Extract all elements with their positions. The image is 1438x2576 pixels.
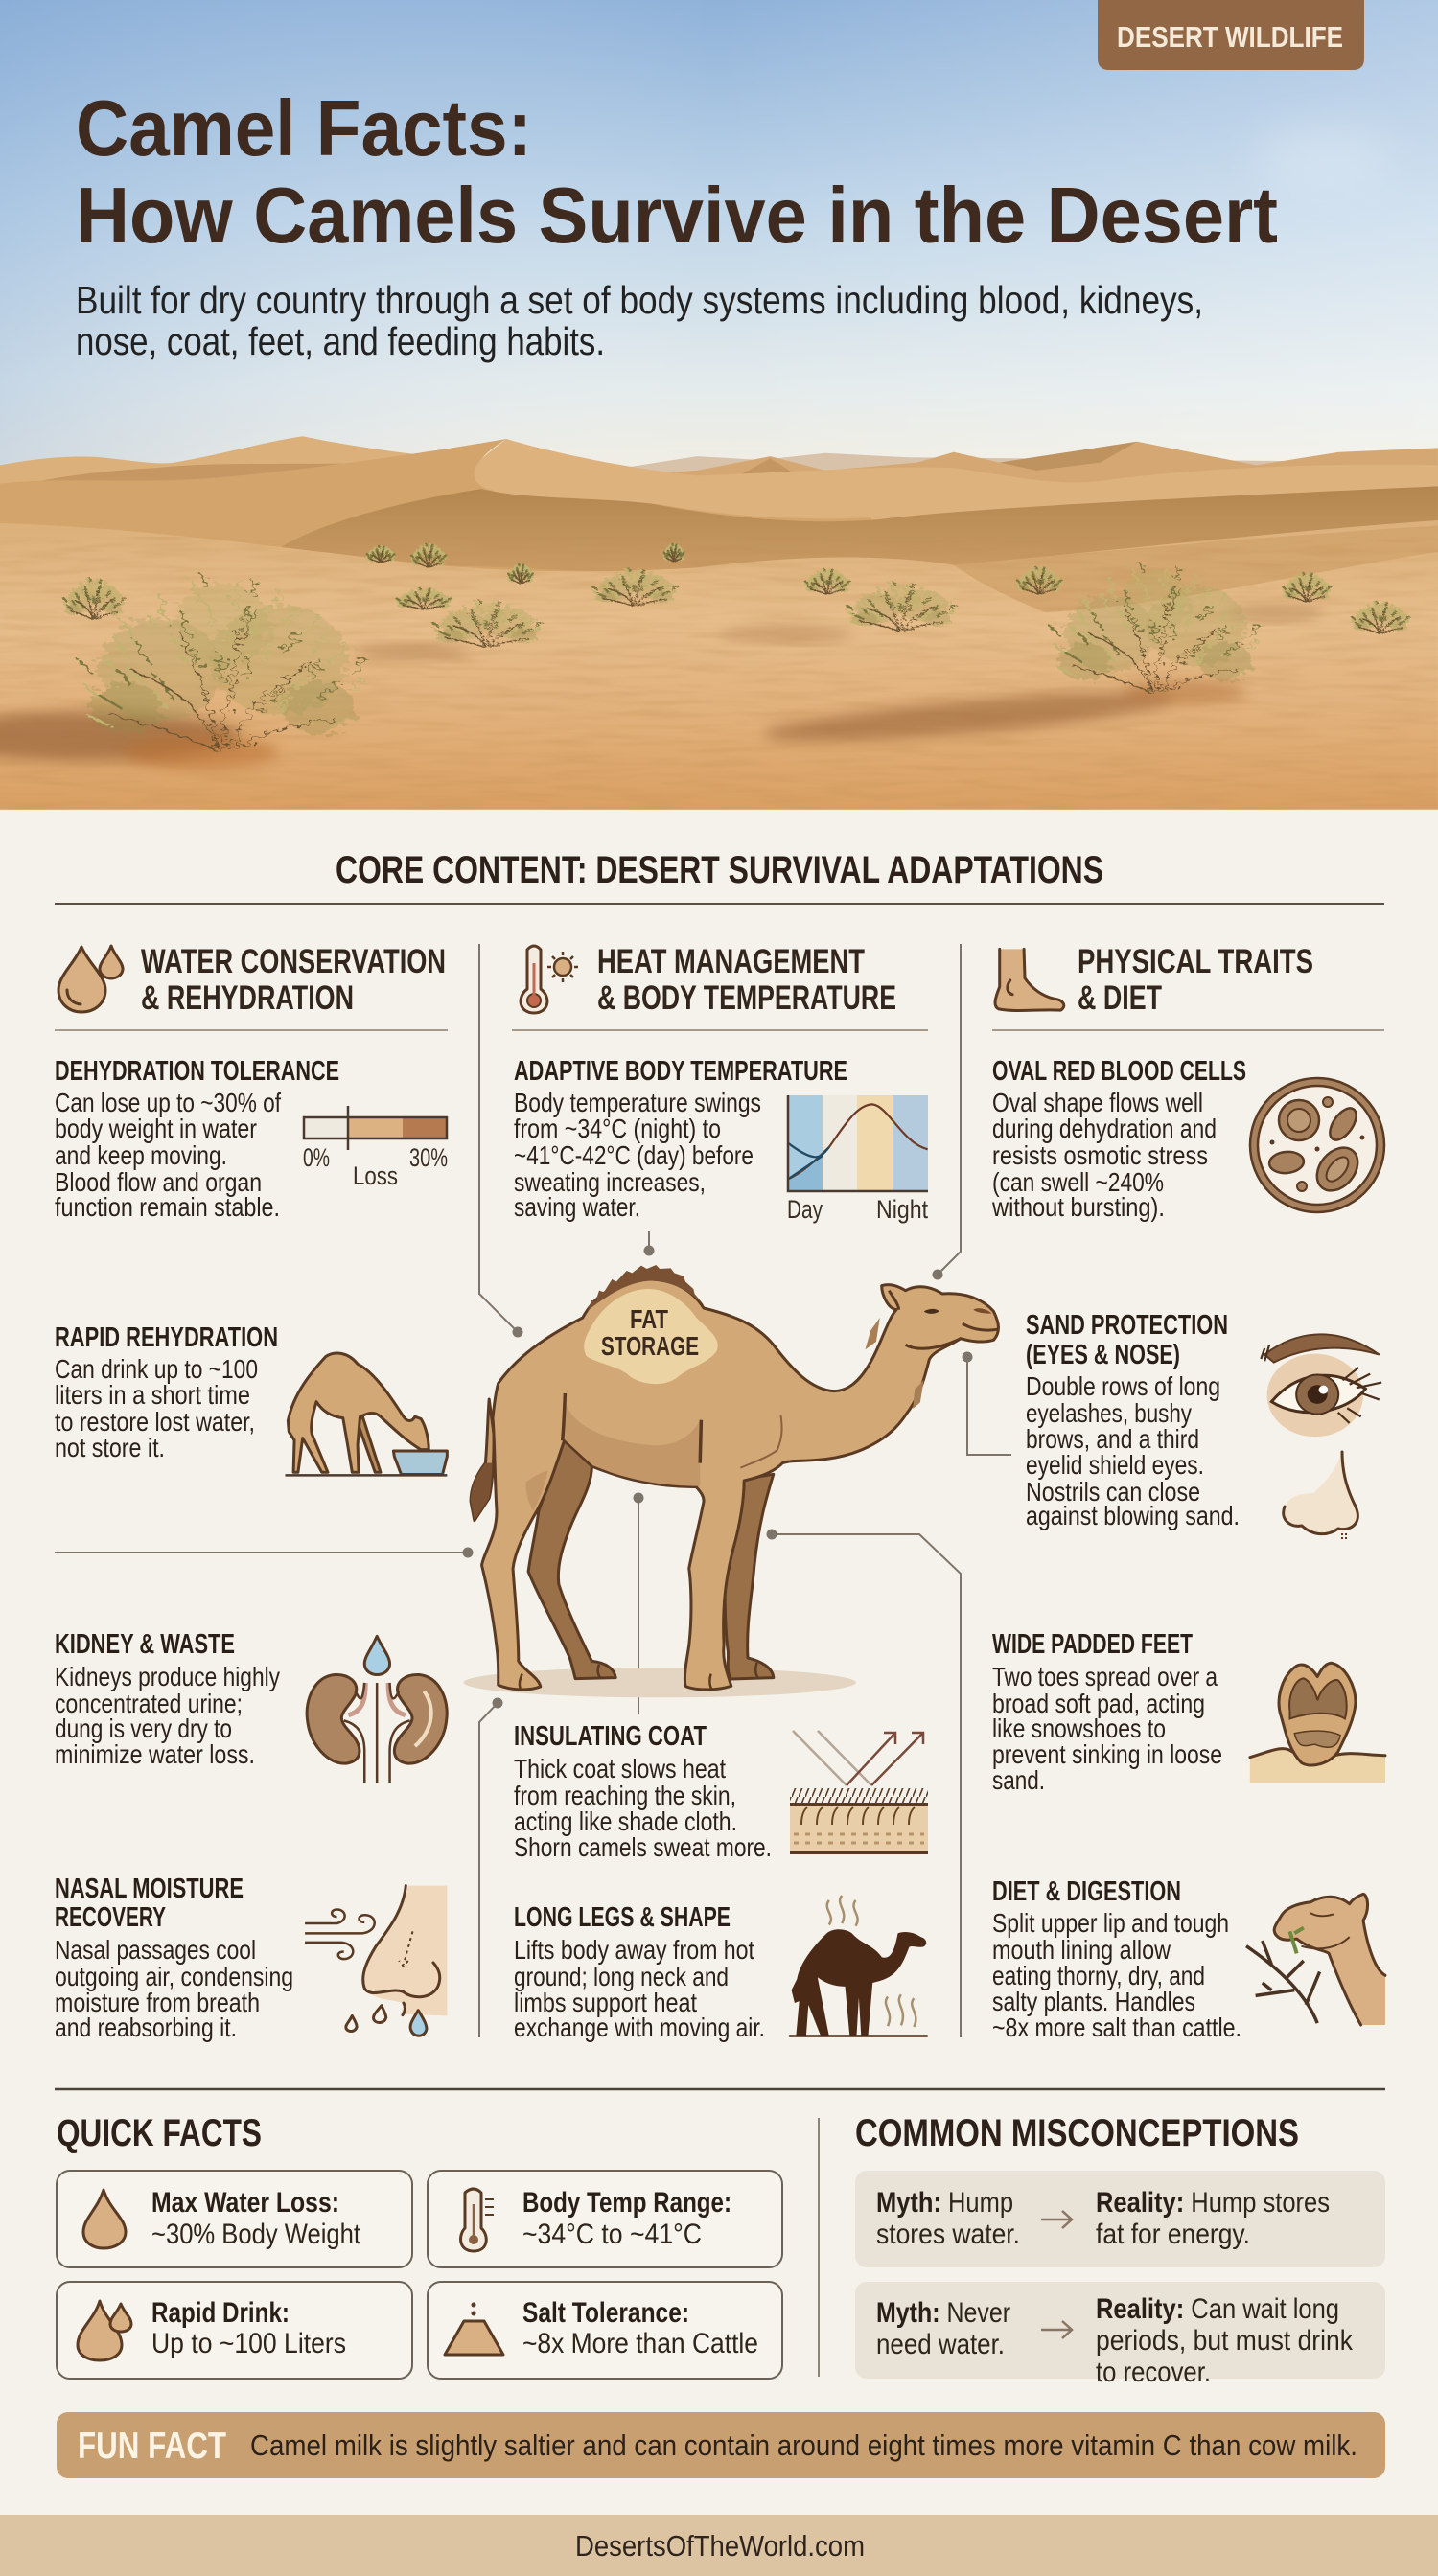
panel: long legs and shape: Lifts body away from hot xyxy=(514,1935,754,1965)
panel: oval red blood cells: resists osmotic stress xyxy=(992,1140,1208,1170)
callout: fun fact xyxy=(57,2412,1385,2478)
panel: nasal moisture recovery: outgoing air, condensing xyxy=(55,1962,293,1991)
hump hair xyxy=(587,1265,704,1311)
panel: long legs and shape: ground; long neck and xyxy=(514,1962,729,1991)
panel: rapid rehydration: not store it. xyxy=(55,1433,165,1462)
chart: water loss bar: 30% xyxy=(409,1143,448,1172)
far hind leg xyxy=(528,1440,615,1679)
belly shade xyxy=(565,1396,700,1486)
panel: wide padded feet: prevent sinking in loose xyxy=(992,1739,1222,1769)
illustration: camel with fat storage: STORAGE xyxy=(601,1331,699,1361)
icon: thermometer and sun xyxy=(521,946,578,1013)
fat storage patch xyxy=(584,1289,718,1384)
myth card: hump xyxy=(855,2171,1385,2267)
title: How Camels Survive in the Desert xyxy=(76,171,1278,260)
card: rapid drink: Rapid Drink: xyxy=(151,2297,290,2329)
panel: kidney and waste: concentrated urine; xyxy=(55,1689,243,1718)
card: rapid drink xyxy=(57,2282,412,2379)
panel: long legs and shape xyxy=(514,1896,928,2042)
panel: wide padded feet: sand. xyxy=(992,1765,1045,1795)
panel: heat management column header xyxy=(512,943,928,1030)
chart: day and night body temperature curve xyxy=(787,1095,928,1224)
myth card: water: Myth: Never xyxy=(876,2297,1010,2329)
myth card: water: Reality: Can wait long xyxy=(1096,2293,1339,2325)
panel: dehydration tolerance: and keep moving. xyxy=(55,1140,227,1170)
panel: oval red blood cells xyxy=(991,1056,1384,1222)
panel: common misconceptions xyxy=(855,2112,1385,2388)
panel: quick facts xyxy=(57,2112,782,2379)
footer: DesertsOfTheWorld.com xyxy=(575,2529,865,2563)
card: body temperature range xyxy=(428,2171,782,2267)
panel: sand protection: eyelid shield eyes. xyxy=(1026,1450,1204,1480)
leader lines to camel xyxy=(55,944,1011,2037)
panel: heat management column header: HEAT MANAGEMENT xyxy=(597,943,865,980)
panel: sand protection: eyelashes, bushy xyxy=(1026,1398,1192,1428)
card: max water loss: ~30% Body Weight xyxy=(151,2219,361,2250)
panel: sand protection: Nostrils can close xyxy=(1026,1477,1200,1506)
panel: diet and digestion: mouth lining allow xyxy=(992,1935,1171,1965)
panel: adaptive body temperature: saving water. xyxy=(514,1192,640,1222)
panel: oval red blood cells: during dehydration and xyxy=(992,1114,1217,1143)
panel: adaptive body temperature: ADAPTIVE BODY TEMPERATURE xyxy=(514,1056,847,1087)
panel: diet and digestion xyxy=(992,1876,1385,2042)
bush: large left xyxy=(79,575,366,749)
myth card: water xyxy=(855,2282,1385,2388)
panel: dehydration tolerance: DEHYDRATION TOLERANCE xyxy=(55,1056,339,1087)
subtitle: nose, coat, feet, and feeding habits. xyxy=(76,319,605,363)
panel: insulating coat: INSULATING COAT xyxy=(514,1721,707,1752)
title xyxy=(76,83,1278,260)
badge: desert wildlife: DESERT WILDLIFE xyxy=(1117,20,1343,54)
illustration: camel with fat storage: FAT xyxy=(630,1304,668,1334)
head details xyxy=(924,1309,939,1314)
badge: desert wildlife xyxy=(1098,0,1364,70)
panel: dehydration tolerance: body weight in water xyxy=(55,1114,257,1143)
panel: sand protection xyxy=(1026,1310,1381,1541)
panel: rapid rehydration xyxy=(55,1322,447,1475)
footer xyxy=(0,2515,1438,2576)
panel: dehydration tolerance: Blood flow and organ xyxy=(55,1167,262,1197)
chart: day and night body temperature curve: Day xyxy=(787,1195,823,1224)
panel: adaptive body temperature: from ~34°C (night) to xyxy=(514,1114,721,1143)
panel: sand protection: against blowing sand. xyxy=(1026,1501,1240,1530)
panel: insulating coat: acting like shade cloth. xyxy=(514,1806,737,1836)
panel: oval red blood cells: without bursting). xyxy=(991,1192,1165,1222)
panel: nasal moisture recovery: and reabsorbing it. xyxy=(55,2012,237,2042)
callout: fun fact: FUN FACT xyxy=(78,2426,226,2467)
panel: long legs and shape: LONG LEGS & SHAPE xyxy=(514,1902,731,1933)
myth card: hump: stores water. xyxy=(876,2219,1020,2250)
panel: rapid rehydration: liters in a short time xyxy=(55,1380,250,1410)
panel: sand protection: Double rows of long xyxy=(1026,1371,1220,1401)
tail xyxy=(471,1399,494,1521)
panel: quick facts: QUICK FACTS xyxy=(57,2112,262,2154)
icon: coat reflecting sun rays xyxy=(790,1731,928,1854)
panel: wide padded feet: Two toes spread over a xyxy=(992,1662,1218,1691)
panel: oval red blood cells: Oval shape flows well xyxy=(992,1088,1203,1117)
panel: nasal moisture recovery: Nasal passages cool xyxy=(55,1935,256,1965)
panel: long legs and shape: limbs support heat xyxy=(514,1988,697,2017)
card: salt tolerance xyxy=(428,2282,782,2379)
panel: oval red blood cells: OVAL RED BLOOD CELLS xyxy=(992,1056,1246,1087)
panel: kidney and waste: dung is very dry to xyxy=(55,1714,232,1743)
bush: large right xyxy=(1050,564,1261,692)
panel: wide padded feet: like snowshoes to xyxy=(992,1714,1166,1743)
panel: diet and digestion: eating thorny, dry, and xyxy=(992,1961,1205,1990)
icon: water drops xyxy=(58,946,123,1012)
icon: kidneys with water drop xyxy=(307,1636,447,1782)
panel: dehydration tolerance: Can lose up to ~30% of xyxy=(55,1088,281,1117)
card: body temperature range: ~34°C to ~41°C xyxy=(522,2219,702,2250)
section heading: core content: CORE CONTENT: DESERT SURVIVAL ADAPTATIONS xyxy=(336,849,1103,891)
panel: nasal moisture recovery xyxy=(55,1874,447,2042)
panel: kidney and waste: Kidneys produce highly xyxy=(55,1662,280,1691)
panel: wide padded feet xyxy=(992,1629,1385,1795)
panel: dehydration tolerance xyxy=(55,1056,448,1222)
icon: blood cells xyxy=(1250,1078,1384,1212)
icon: camel silhouette with heat waves xyxy=(789,1896,928,2036)
panel: rapid rehydration: to restore lost water, xyxy=(55,1407,255,1437)
panel: rapid rehydration: Can drink up to ~100 xyxy=(55,1354,258,1384)
subtitle xyxy=(76,278,1203,363)
panel: physical traits column header: & DIET xyxy=(1078,979,1162,1017)
subtitle: Built for dry country through a set of body systems including blood, kidneys, xyxy=(76,278,1203,322)
panel: rapid rehydration: RAPID REHYDRATION xyxy=(55,1322,278,1353)
myth card: hump: fat for energy. xyxy=(1096,2219,1250,2250)
icon: nose xyxy=(1284,1452,1357,1541)
panel: wide padded feet: WIDE PADDED FEET xyxy=(992,1629,1193,1660)
panel: adaptive body temperature: ~41°C-42°C (day) before xyxy=(514,1140,754,1170)
panel: diet and digestion: salty plants. Handles xyxy=(992,1987,1195,2016)
panel: nasal moisture recovery: moisture from breath xyxy=(55,1988,260,2017)
panel: diet and digestion: ~8x more salt than cattle. xyxy=(992,2012,1241,2042)
panel: water conservation column header xyxy=(55,943,448,1030)
far front leg xyxy=(724,1474,774,1679)
chart: water loss bar: 0% xyxy=(303,1143,330,1172)
hero desert photo xyxy=(0,0,1438,810)
panel: dehydration tolerance: function remain stable. xyxy=(55,1192,280,1222)
panel: diet and digestion: Split upper lip and tough xyxy=(992,1908,1229,1938)
panel: insulating coat: Thick coat slows heat xyxy=(514,1754,726,1783)
myth card: hump: Reality: Hump stores xyxy=(1096,2187,1330,2219)
panel: sand protection: SAND PROTECTION xyxy=(1026,1310,1228,1341)
myth card: water: need water. xyxy=(876,2329,1005,2360)
panel: water conservation column header: & REHYDRATION xyxy=(141,979,354,1017)
panel: nasal moisture recovery: RECOVERY xyxy=(55,1902,166,1933)
chart: day and night body temperature curve: Night xyxy=(876,1195,928,1224)
icon: foot xyxy=(995,949,1064,1010)
panel: nasal moisture recovery: NASAL MOISTURE xyxy=(55,1874,244,1904)
panel: adaptive body temperature: Body temperature swings xyxy=(514,1088,761,1117)
panel: common misconceptions: COMMON MISCONCEPTIONS xyxy=(855,2112,1299,2154)
icon: padded camel foot in sand xyxy=(1250,1663,1385,1782)
panel: kidney and waste xyxy=(55,1629,447,1782)
panel: sand protection: (EYES & NOSE) xyxy=(1026,1340,1180,1370)
panel: kidney and waste: minimize water loss. xyxy=(55,1739,255,1769)
ground shadow xyxy=(463,1668,856,1697)
panel: insulating coat: Shorn camels sweat more. xyxy=(514,1832,772,1862)
panel: physical traits column header: PHYSICAL TRAITS xyxy=(1078,943,1313,980)
icon: nose with moist air xyxy=(305,1886,447,2036)
card: max water loss: Max Water Loss: xyxy=(151,2187,339,2219)
chart: water loss bar xyxy=(303,1106,448,1190)
panel: diet and digestion: DIET & DIGESTION xyxy=(992,1876,1181,1907)
panel: physical traits column header xyxy=(992,943,1384,1030)
panel: heat management column header: & BODY TEMPERATURE xyxy=(597,979,896,1017)
icon: camel drinking from a bowl xyxy=(286,1353,447,1475)
panel: water conservation column header: WATER CONSERVATION xyxy=(141,943,446,980)
divider above bottom panels xyxy=(55,2088,1385,2090)
icon: camel eating thorny plant xyxy=(1246,1894,1385,2025)
panel: insulating coat xyxy=(514,1721,928,1862)
myth card: hump: Myth: Hump xyxy=(876,2187,1013,2219)
card: rapid drink: Up to ~100 Liters xyxy=(151,2328,346,2359)
panel: wide padded feet: broad soft pad, acting xyxy=(992,1689,1205,1718)
panel: adaptive body temperature xyxy=(514,1056,928,1224)
myth card: water: to recover. xyxy=(1096,2357,1211,2388)
illustration: camel with fat storage xyxy=(463,1265,998,1697)
panel: kidney and waste: KIDNEY & WASTE xyxy=(55,1629,235,1660)
chart: water loss bar: Loss xyxy=(353,1162,398,1190)
body and near legs xyxy=(482,1279,998,1690)
panel: insulating coat: from reaching the skin, xyxy=(514,1781,736,1810)
card: max water loss xyxy=(57,2171,412,2267)
panel: sand protection: brows, and a third xyxy=(1026,1424,1199,1454)
panel: adaptive body temperature: sweating increases, xyxy=(514,1167,706,1197)
card: body temperature range: Body Temp Range: xyxy=(522,2187,731,2219)
card: salt tolerance: Salt Tolerance: xyxy=(522,2297,689,2329)
title: Camel Facts: xyxy=(76,83,532,172)
panel: oval red blood cells: (can swell ~240% xyxy=(992,1167,1164,1197)
icon: eye with lashes xyxy=(1261,1334,1381,1437)
myth card: water: periods, but must drink xyxy=(1096,2325,1354,2357)
panel: long legs and shape: exchange with moving air. xyxy=(514,2012,765,2042)
card: salt tolerance: ~8x More than Cattle xyxy=(522,2328,758,2359)
